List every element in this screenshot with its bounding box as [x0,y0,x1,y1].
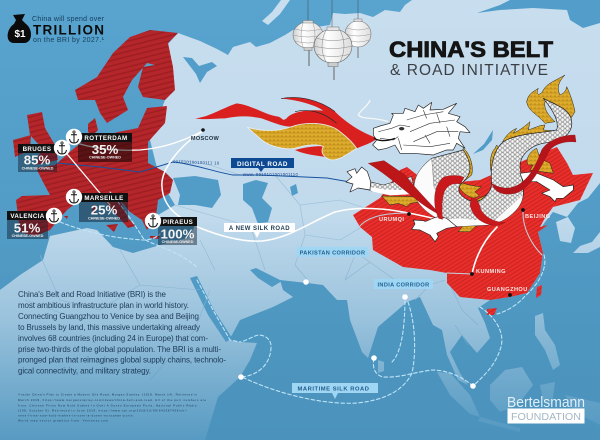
ownership box [7,220,48,239]
footnotes: nese-firms-now-hold-stakes-in-over-a-dozen-european-ports. [18,414,134,418]
dashed: Adriatic route [110,192,198,268]
intro paragraph: pronged plan that reimagines global supply chains, technolo- [18,356,226,364]
intro paragraph: involves 68 countries (including 24 in Europe) that com- [18,334,208,343]
port: Rotterdam: CHINESE-OWNED [89,156,121,160]
front arm underside [360,185,415,195]
land: Sri Lanka [378,360,384,373]
road: Kunming [472,227,497,274]
gold tail flame [248,123,357,160]
road: Urumqi to Pakistan corridor [358,213,408,228]
map: China highlighted red [353,147,593,315]
node: Malacca [470,383,476,389]
Ireland [13,135,31,157]
land: Korea [556,217,575,243]
callout trillion: TRILLION [33,22,104,38]
city: Moscow: MOSCOW [191,136,220,142]
footnotes: (209, October 9). Retrieved in June 2019, https://www.npr.org/2018/10/09/642587456/chi- [18,408,187,412]
ownership value: 51% [14,220,40,236]
land: Sumatra [437,372,480,417]
road: Rotterdam to Moscow [73,131,203,150]
Great Britain [27,112,58,165]
road: Bruges to Marseille [62,148,110,205]
front arm fin [382,196,422,207]
node: Pakistan [303,279,309,285]
front claw [346,167,371,192]
intro paragraph: prise two-thirds of the global population. The BRI is a multi- [18,345,221,354]
strings [308,0,358,28]
route: white silk road lines [62,131,542,274]
land: Novaya Zemlya [262,0,290,25]
red tail flame [195,97,378,158]
sea: Red Sea [190,276,232,342]
lanterns [293,0,371,80]
dashed: Mediterranean route [60,222,160,240]
port name [80,193,128,202]
sea: Arctic coastline top right [477,0,600,28]
ownership value: 100% [160,226,195,242]
Mainland Europe [16,106,173,236]
footnotes: March 2019, https://www.morganstanley.com/ideas/china-belt-and-road. All of the port numbers are [18,398,206,402]
ribbon: neck loop [435,175,464,219]
body scales [414,98,572,227]
belly white upper [414,158,443,220]
icon: anchor [46,208,62,224]
port: Marseille: MARSEILLE [84,195,124,202]
label: India corridor: INDIA CORRIDOR [378,282,429,288]
port name [7,211,49,220]
dashed: India corridor to Indian Ocean [242,302,415,403]
port: Valencia: VALENCIA [10,213,45,220]
ocean inlets on land [173,0,600,342]
title line two: & ROAD INITIATIVE [390,62,548,79]
port: Piraeus: CHINESE-OWNED [162,240,194,244]
sea: Persian Gulf [250,268,282,287]
port: Bruges: BRUGES [23,146,51,153]
logo wordmark: Bertelsmann [507,395,585,411]
Scandinavia [75,30,178,123]
dragon tail flames [195,97,378,160]
lower neck fin [458,182,482,198]
footnotes [18,392,206,422]
title line one: CHINA'S BELT [389,37,554,62]
footnotes: World map vector graphics from: Vecteezy.com [18,418,109,422]
digital road binary text: www. 0010101001001110 [243,172,298,177]
hind leg and claw [412,217,457,242]
dashed: China coast to South China Sea [497,255,545,314]
neck fin [460,148,472,183]
callout line three: on the BRI by 2027.¹ [33,37,105,44]
logo: Bertelsmann Foundation: FOUNDATION [511,411,581,423]
dragon [346,75,576,242]
lantern centre [314,27,352,80]
front arm [360,177,415,195]
lantern right [345,19,371,58]
lantern left [293,20,323,66]
icon: anchor [145,213,161,229]
route: digital road [57,159,375,184]
city: Moscow [191,128,220,142]
city: Kunming: KUNMING [476,269,506,275]
city: Urumqi: URUMQI [379,217,404,223]
ownership value: 25% [91,202,117,218]
sea: Caspian [243,180,272,224]
sea: Black Sea [173,176,221,208]
land: Java and Sulawesi [478,382,600,432]
Taiwan [536,285,542,298]
callout: one trillion dollars [8,14,105,44]
right leg and claw [520,172,573,202]
land: Borneo [490,367,533,412]
port: Piraeus [145,213,197,245]
footnotes: ¹Inside China's Plan to Create a Modern Silk Road, Morgan Stanley. (2018, March 14). Retrieved in [18,392,197,396]
Hainan [487,308,497,315]
sea: White Sea [183,57,217,83]
icon: anchor [66,189,82,205]
city: Beijing: BEIJING [525,214,551,220]
port: Rotterdam [66,129,132,162]
ribbon: upper sweep [492,135,576,194]
road: Beijing to coast [523,210,542,255]
city: Beijing [521,208,551,220]
dragon face and mane lines [378,110,458,150]
dashed: Horn of Africa loop [240,335,271,377]
ownership box [78,142,132,162]
label: Pakistan corridor [297,247,368,257]
port: Bruges: CHINESE-OWNED [22,166,54,170]
sea: Aral [290,184,298,196]
intro paragraph: most ambitious infrastructure plan in world history. [18,301,189,310]
label: a new silk road: A NEW SILK ROAD [229,226,290,232]
dashed: Red Sea [197,280,240,342]
ownership box [79,202,128,222]
dark flame highlight [281,97,337,123]
port name [80,133,132,142]
city: Guangzhou [487,287,528,297]
port: Piraeus: PIRAEUS [163,219,193,226]
ribbon: left streamer [368,161,444,218]
Mediterranean islands [64,205,160,239]
digital road line [57,162,375,184]
city: Urumqi [379,212,411,223]
dashed: Sri Lanka to India corridor [392,297,405,362]
icon: money bag: $1 [14,29,26,40]
bottom fin [458,213,485,232]
belly white lower [440,195,523,227]
route nodes [238,279,476,389]
port: Marseille: CHINESE-OWNED [88,216,120,220]
dragon head and mane [373,102,470,155]
dashed: Vietnam to Strait of Malacca [473,307,502,386]
intro paragraph: China's Belt and Road Initiative (BRI) is the [18,290,167,299]
label: a new silk road [224,223,295,238]
sea: Baikal [473,130,493,154]
port name [158,217,197,226]
port name [18,144,55,153]
label: digital road [231,158,294,172]
logo foundation box [508,408,584,424]
mid fin [473,185,492,202]
upper back fin [490,122,557,180]
city labels in China [379,208,551,297]
port: Marseille [66,189,128,222]
intro paragraph: Connecting Guangzhou to Venice by sea and Beijing [18,312,199,321]
port: Valencia [7,208,62,239]
node: East Africa [238,374,244,380]
intro paragraph: gical connectivity, and military strategy. [18,366,151,376]
road: Moscow to new silk road [162,131,440,241]
dashed: Malacca to Sri Lanka [373,358,473,386]
label: digital road: DIGITAL ROAD [237,161,288,168]
ownership value: 35% [92,142,118,157]
port: Valencia: CHINESE-OWNED [12,234,44,238]
ownership box [18,153,57,172]
label: maritime silk road [292,383,378,399]
label: India corridor [374,279,433,289]
label: Pakistan corridor: PAKISTAN CORRIDOR [300,250,365,256]
footnotes: from: Chinese Firms Now Hold Stakes In Over A Dozen European Ports, National Public Radio. [18,403,198,407]
intro paragraph: to Brussels by land, this massive undertaking already [18,323,200,332]
land: Philippines [535,313,560,370]
port: Bruges [18,140,70,172]
dragon eye [399,127,404,130]
ribbon: lower loop [470,197,505,225]
map: Europe highlighted red [13,30,178,239]
country borders [25,160,478,380]
city: Guangzhou: GUANGZHOU [487,287,528,293]
dragon whisker [358,100,388,122]
route: maritime silk road [60,192,545,403]
road: Kunming west spur [447,273,472,274]
ownership box [158,226,197,245]
inner leg fin [527,148,553,173]
China mainland [353,147,593,300]
icon: anchor [54,140,70,156]
Denmark [88,118,98,135]
ownership value: 85% [24,152,50,168]
dragon mouth [374,138,395,140]
intro paragraph [18,290,226,376]
tail flame fin [527,75,575,123]
logo: Bertelsmann Foundation [507,395,585,424]
callout line one: China will spend over [32,16,105,23]
port: Rotterdam: ROTTERDAM [84,135,128,142]
title [389,37,554,79]
node: Sri Lanka [371,355,377,361]
node: India [402,294,408,300]
land: Japan [573,232,600,253]
icon: anchor [66,129,82,145]
digital road binary text: 001010100100111 10 [173,159,220,166]
label: maritime silk road: MARITIME SILK ROAD [297,386,370,392]
gold fins [382,75,575,232]
